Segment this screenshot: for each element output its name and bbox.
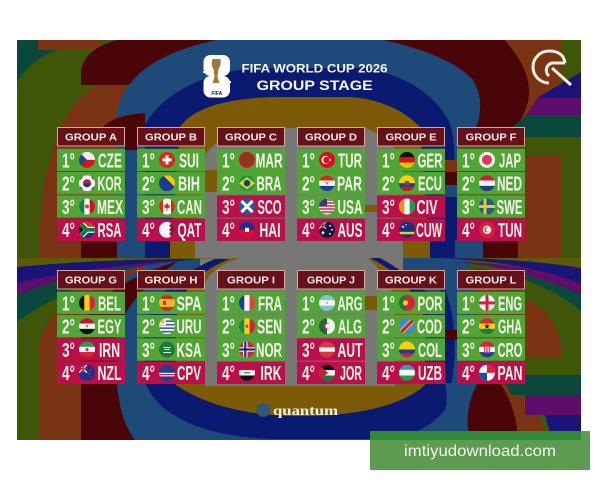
row: TUR <box>297 149 365 172</box>
row: COD: COD <box>417 317 442 339</box>
row: MAR: 1° <box>222 150 235 172</box>
panel: group I <box>217 270 285 385</box>
row: PAR <box>297 172 365 196</box>
row: BRA: BRA <box>256 174 282 196</box>
row: PAR: PAR <box>337 174 362 196</box>
row: MAR: MAR <box>256 150 283 172</box>
row: CUW <box>377 219 445 242</box>
row: ENG: 1° <box>462 293 475 315</box>
row: PAN: PAN <box>498 363 522 385</box>
row: KOR <box>57 172 125 196</box>
row: CUW: CUW <box>416 220 442 242</box>
row: MEX <box>57 195 125 219</box>
row: COD: 2° <box>382 317 395 339</box>
row: RSA <box>57 219 125 242</box>
row: USA: USA <box>338 197 362 219</box>
row: MEX: MEX <box>97 197 123 219</box>
row: ARG <box>297 292 365 315</box>
row: EGY: 2° <box>62 317 75 339</box>
background artwork <box>17 40 581 440</box>
row: AUT: AUT <box>338 340 362 362</box>
row: JOR <box>297 362 365 385</box>
row: URU <box>137 315 205 339</box>
row: ARG: ARG <box>338 293 362 315</box>
row: KOR: KOR <box>98 174 122 196</box>
row: NED: 2° <box>462 174 475 196</box>
panel: group L <box>457 270 525 385</box>
panel: group K <box>377 270 445 385</box>
row: CPV: 4° <box>142 363 155 385</box>
heading: group D: GROUP D <box>305 132 357 144</box>
row: IRN: 3° <box>62 340 75 362</box>
row: RSA: 4° <box>62 220 75 242</box>
panel: group C <box>217 128 285 242</box>
row: COL <box>377 338 445 362</box>
panel: group F <box>457 128 525 242</box>
row: CUW: 4° <box>382 220 395 242</box>
row: GER <box>377 149 445 172</box>
row: TUN: 4° <box>462 220 475 242</box>
row: PAN <box>457 362 525 385</box>
heading: group F: GROUP F <box>466 132 517 144</box>
row: ECU: ECU <box>418 174 442 196</box>
row: SCO: 3° <box>222 197 235 219</box>
row: SUI: 1° <box>142 150 155 172</box>
row: AUT: 3° <box>302 340 315 362</box>
row: SUI <box>137 149 205 172</box>
row: POR <box>377 292 445 315</box>
row: JOR: 4° <box>302 363 315 385</box>
row: SEN <box>217 315 285 339</box>
heading: group H: GROUP H <box>144 274 198 286</box>
row: SWE: 3° <box>462 197 475 219</box>
heading: group A: GROUP A <box>65 132 117 144</box>
heading: group C: GROUP C <box>225 132 277 144</box>
panel: group J <box>297 270 365 385</box>
row: NED <box>457 172 525 196</box>
row: BRA <box>217 172 285 196</box>
row: CAN: 3° <box>142 197 155 219</box>
row: HAI <box>217 219 285 242</box>
panel: group G <box>57 270 125 385</box>
row: CPV: CPV <box>177 363 201 385</box>
row: CAN: CAN <box>177 197 202 219</box>
row: URU: URU <box>176 317 202 339</box>
title: FIFA WORLD CUP 2026 <box>242 62 388 76</box>
row: GER: GER <box>418 150 443 172</box>
row: TUN <box>457 219 525 242</box>
row: EGY: EGY <box>98 317 122 339</box>
row: TUR: TUR <box>338 150 362 172</box>
row: IRN <box>57 338 125 362</box>
row: NZL: 4° <box>62 363 75 385</box>
row: AUS: AUS <box>338 220 362 242</box>
row: AUS: 4° <box>302 220 315 242</box>
row: TUN: TUN <box>498 220 522 242</box>
row: BIH <box>137 172 205 196</box>
row: PAN: 4° <box>462 363 475 385</box>
heading: group B: GROUP B <box>145 132 197 144</box>
row: URU: 2° <box>142 317 155 339</box>
row: GHA <box>457 315 525 339</box>
row: NOR: 3° <box>222 340 235 362</box>
heading: group J: GROUP J <box>307 274 355 286</box>
panel: group H <box>137 270 205 385</box>
row: POR: 1° <box>382 293 395 315</box>
row: TUR: 1° <box>302 150 315 172</box>
row: CZE <box>57 149 125 172</box>
row: CIV: 3° <box>382 197 395 219</box>
row: ENG: ENG <box>498 293 522 315</box>
row: ENG <box>457 292 525 315</box>
row: SUI: SUI <box>179 150 199 172</box>
row: IRK: IRK <box>260 363 282 385</box>
row: FRA: FRA <box>258 293 282 315</box>
row: NOR: NOR <box>256 340 282 362</box>
row: NZL: NZL <box>98 363 122 385</box>
row: BIH: BIH <box>178 174 200 196</box>
heading: group L: GROUP L <box>466 274 517 286</box>
row: MEX: 3° <box>62 197 75 219</box>
row: COL: 3° <box>382 340 395 362</box>
row: SPA <box>137 292 205 315</box>
row: GHA: 2° <box>462 317 475 339</box>
panel: group A <box>57 128 125 242</box>
icon: brand logo top right <box>533 51 571 85</box>
row: NZL <box>57 362 125 385</box>
sponsor: quantum logo <box>256 403 338 419</box>
row: BEL <box>57 292 125 315</box>
row: ECU: 2° <box>382 174 395 196</box>
row: CIV <box>377 195 445 219</box>
row: NOR <box>217 338 285 362</box>
row: AUT <box>297 338 365 362</box>
row: CZE: CZE <box>98 150 122 172</box>
row: BRA: 2° <box>222 174 235 196</box>
sponsor: quantum logo: quantum <box>273 404 338 419</box>
row: SCO <box>217 195 285 219</box>
row: ALG: 2° <box>302 317 315 339</box>
row: USA: 3° <box>302 197 315 219</box>
icon: FIFA 2026 trophy logo <box>203 55 231 98</box>
panel: group E <box>377 128 445 242</box>
row: HAI: 4° <box>222 220 235 242</box>
row: CIV: CIV <box>416 197 438 219</box>
row: KSA <box>137 338 205 362</box>
row: FRA: 1° <box>222 293 235 315</box>
row: KOR: 2° <box>62 174 75 196</box>
row: USA <box>297 195 365 219</box>
row: RSA: RSA <box>98 220 122 242</box>
row: ARG: 1° <box>302 293 315 315</box>
row: EGY <box>57 315 125 339</box>
row: QAT: QAT <box>178 220 202 242</box>
row: PAR: 2° <box>302 174 315 196</box>
heading: group E: GROUP E <box>386 132 436 144</box>
row: IRK: 4° <box>222 363 235 385</box>
row: MAR <box>217 149 285 172</box>
panel: group D <box>297 128 365 242</box>
row: SEN: SEN <box>257 317 282 339</box>
row: BIH: 2° <box>142 174 155 196</box>
row: CZE: 1° <box>62 150 75 172</box>
row: JAP: 1° <box>462 150 475 172</box>
row: NED: NED <box>497 174 522 196</box>
row: ECU <box>377 172 445 196</box>
panel: group B <box>137 128 205 242</box>
row: IRN: IRN <box>99 340 120 362</box>
row: JAP <box>457 149 525 172</box>
row: IRK <box>217 362 285 385</box>
row: UZB: 4° <box>382 363 395 385</box>
row: ALG <box>297 315 365 339</box>
row: UZB <box>377 362 445 385</box>
row: GHA: GHA <box>498 317 522 339</box>
row: QAT: 4° <box>142 220 155 242</box>
heading: group I: GROUP I <box>227 274 275 286</box>
row: SWE <box>457 195 525 219</box>
row: KSA: 3° <box>142 340 155 362</box>
row: FRA <box>217 292 285 315</box>
row: HAI: HAI <box>260 220 280 242</box>
title <box>242 62 388 93</box>
icon: FIFA 2026 trophy logo: FIFA <box>211 91 223 97</box>
row: BEL: 1° <box>62 293 75 315</box>
row: KSA: KSA <box>176 340 202 362</box>
row: CPV <box>137 362 205 385</box>
row: JAP: JAP <box>499 150 521 172</box>
row: SPA: SPA <box>176 293 202 315</box>
watermark banner: imtiyudownload.com <box>404 443 556 460</box>
row: BEL: BEL <box>98 293 121 315</box>
row: CRO: 3° <box>462 340 475 362</box>
row: UZB: UZB <box>418 363 442 385</box>
row: SPA: 1° <box>142 293 155 315</box>
row: COL: COL <box>418 340 442 362</box>
heading: group K: GROUP K <box>385 274 437 286</box>
watermark banner <box>370 431 590 470</box>
row: JOR: JOR <box>340 363 362 385</box>
row: POR: POR <box>418 293 443 315</box>
row: AUS <box>297 219 365 242</box>
row: SWE: SWE <box>496 197 522 219</box>
row: ALG: ALG <box>338 317 362 339</box>
row: SCO: SCO <box>258 197 282 219</box>
heading: group G: GROUP G <box>65 274 117 286</box>
row: SEN: 2° <box>222 317 235 339</box>
row: CRO <box>457 338 525 362</box>
row: CAN <box>137 195 205 219</box>
title: GROUP STAGE <box>257 77 373 93</box>
row: GER: 1° <box>382 150 395 172</box>
row: COD <box>377 315 445 339</box>
row: QAT <box>137 219 205 242</box>
row: CRO: CRO <box>498 340 522 362</box>
